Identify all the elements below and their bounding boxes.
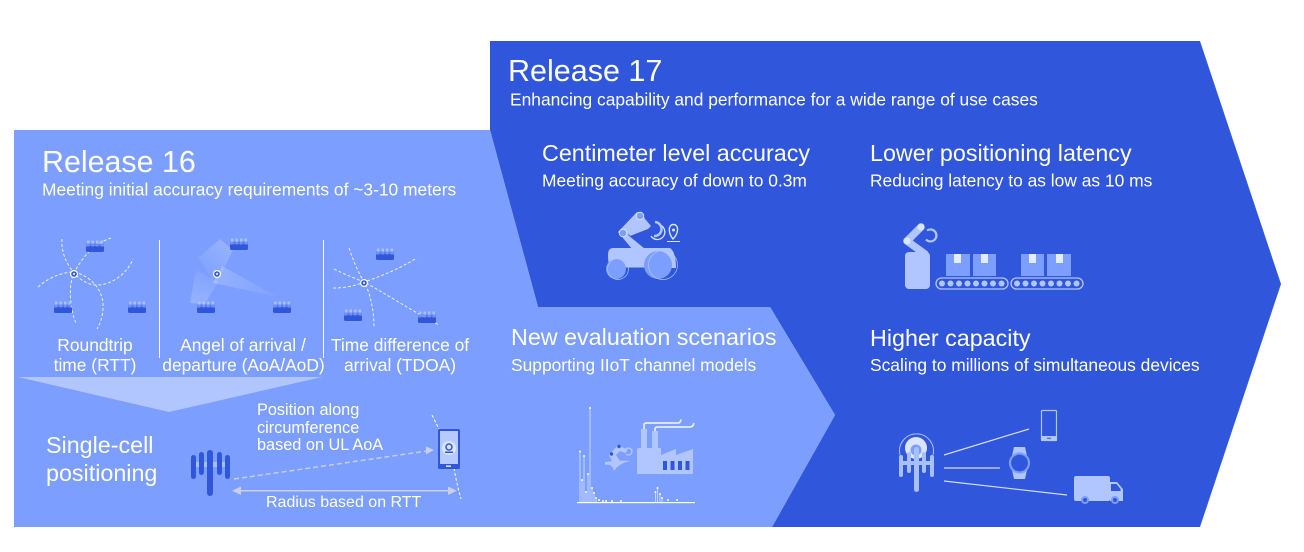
- block: higher capacity: [870, 325, 1200, 375]
- label: time difference of arrival: Time difference of: [331, 335, 469, 355]
- icon: smartwatch: [1010, 447, 1029, 479]
- icon: delivery truck: [1074, 476, 1123, 503]
- block: new evaluation scenarios: [511, 324, 776, 375]
- label: position along circumference: based on UL AoA: [257, 436, 383, 454]
- heading: release 17: Release 17: [508, 54, 662, 88]
- block: lower positioning latency: Lower positioning latency: [870, 140, 1132, 166]
- label: roundtrip time: time (RTT): [54, 355, 136, 375]
- panel: release 17: [490, 41, 1281, 527]
- icon: robotic arm with location pin: [606, 212, 680, 280]
- icon: base station with signal: [899, 434, 934, 492]
- label: angle of arrival: Angel of arrival /: [180, 335, 306, 355]
- chart: channel model spikes: [577, 407, 695, 503]
- block: centimeter level accuracy: [542, 140, 810, 190]
- block: new evaluation scenarios: Supporting IIoT channel models: [511, 355, 757, 375]
- diagram: roundtrip time: [38, 238, 146, 329]
- arrow: funnel to single-cell: [18, 377, 322, 412]
- heading: single-cell positioning: Single-cell: [46, 432, 153, 458]
- divider: [323, 240, 324, 358]
- icon: robot arm on conveyor belts: [904, 224, 1083, 289]
- label: position along circumference: Position along: [257, 401, 359, 419]
- heading: single-cell positioning: positioning: [46, 460, 157, 486]
- label: angle of arrival: departure (AoA/AoD): [162, 355, 325, 375]
- heading: release 16: Release 16: [42, 145, 196, 179]
- block: centimeter level accuracy: Meeting accuracy of down to 0.3m: [542, 170, 807, 190]
- block: lower positioning latency: Reducing latency to as low as 10 ms: [870, 170, 1153, 190]
- label: position along circumference: circumference: [257, 419, 359, 437]
- block: centimeter level accuracy: Centimeter level accuracy: [542, 140, 810, 166]
- icon: phone with pin: [438, 429, 460, 469]
- panel: release 16: [14, 130, 835, 527]
- arrow: radius double arrow: [232, 486, 457, 495]
- icon: small robot arm: [605, 445, 632, 471]
- arrow: dashed angle line: [234, 446, 434, 479]
- block: new evaluation scenarios: New evaluation scenarios: [511, 324, 776, 350]
- divider: [159, 240, 160, 358]
- label: radius based on rtt: Radius based on RTT: [266, 494, 422, 511]
- diagram: time difference of arrival: [333, 248, 439, 327]
- label: time difference of arrival: arrival (TDOA): [344, 355, 456, 375]
- icon: factory: [637, 420, 694, 474]
- icon: smartphone: [1041, 410, 1057, 441]
- diagram: angle of arrival: [190, 238, 291, 313]
- label: roundtrip time: Roundtrip: [57, 335, 133, 355]
- connector lines to devices: [944, 429, 1067, 495]
- block: higher capacity: Higher capacity: [870, 325, 1031, 351]
- subtitle: release 16: Meeting initial accuracy requirements of ~3-10 meters: [42, 180, 456, 200]
- block: lower positioning latency: [870, 140, 1153, 190]
- block: higher capacity: Scaling to millions of simultaneous devices: [870, 355, 1200, 375]
- icon: antenna: [191, 450, 230, 496]
- subtitle: release 17: Enhancing capability and performance for a wide range of use cases: [510, 90, 1038, 110]
- dashed circumference arc: [432, 415, 461, 499]
